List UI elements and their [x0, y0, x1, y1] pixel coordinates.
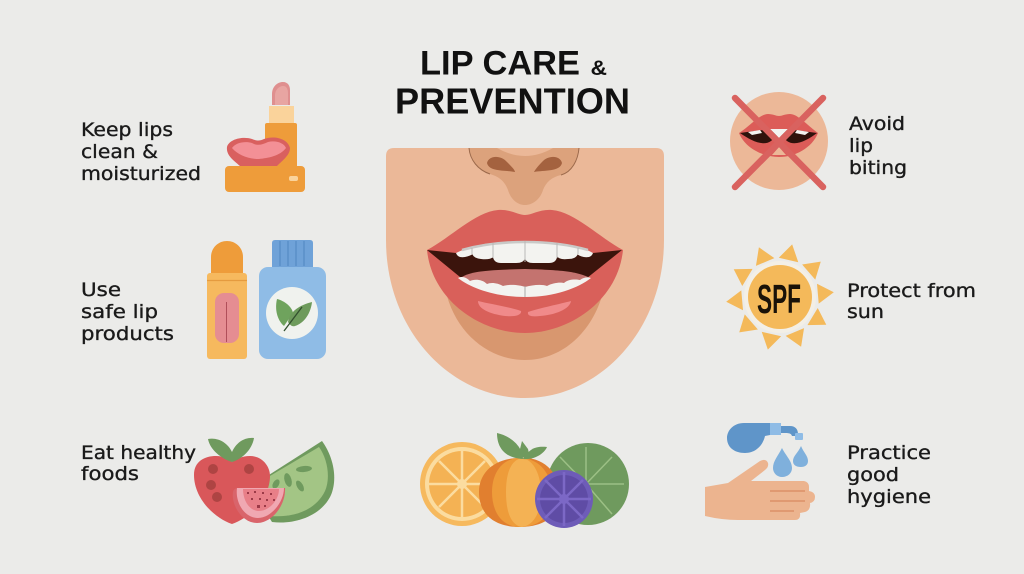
icon: lipstick with lips — [225, 82, 305, 192]
label: clean & — [81, 141, 158, 163]
icon: strawberry — [194, 438, 270, 524]
central face illustration — [386, 148, 664, 398]
item: avoid lip biting — [730, 92, 907, 190]
icon: SPF sun: SPF — [757, 276, 801, 322]
pumpkin leaves — [497, 433, 547, 459]
title — [395, 44, 630, 122]
label: sun — [847, 301, 884, 323]
icon: bottle with leaf — [259, 240, 326, 359]
icon: lip balm tube — [207, 241, 247, 359]
title: LIP CARE — [420, 44, 580, 82]
item: eat healthy foods — [81, 438, 334, 524]
label: Practice — [847, 442, 931, 464]
label: Use — [81, 279, 121, 301]
lime — [547, 443, 629, 525]
label — [849, 113, 907, 179]
label: safe lip — [81, 301, 158, 323]
label: products — [81, 323, 174, 345]
purple citrus — [535, 470, 593, 528]
tongue — [460, 269, 590, 289]
icon: water drops — [773, 446, 808, 477]
label: Avoid — [849, 113, 905, 135]
label: foods — [81, 463, 139, 485]
upper teeth — [456, 241, 593, 263]
label — [81, 442, 196, 485]
lower teeth — [458, 277, 591, 297]
mouth interior — [427, 243, 622, 288]
label — [81, 279, 174, 345]
nose — [469, 148, 579, 205]
item: keep lips clean and moisturized — [81, 82, 305, 192]
chin shadow — [447, 296, 602, 360]
icon: watermelon wedge — [250, 441, 334, 523]
icon: faucet — [727, 423, 803, 453]
icon: crossed-out lips — [730, 92, 828, 190]
label — [847, 280, 976, 323]
item: practice good hygiene — [705, 423, 931, 520]
label — [81, 119, 201, 185]
pumpkin — [479, 458, 560, 527]
label: good — [847, 464, 899, 486]
label: Keep lips — [81, 119, 173, 141]
item: use safe lip products — [81, 240, 326, 359]
icon: hand — [705, 460, 815, 520]
label: hygiene — [847, 486, 931, 508]
label: Protect from — [847, 280, 976, 302]
label — [847, 442, 931, 508]
label: moisturized — [81, 163, 201, 185]
orange slice — [420, 442, 504, 526]
label: biting — [849, 157, 907, 179]
item: protect from sun — [725, 242, 976, 352]
title: PREVENTION — [395, 80, 630, 122]
title: & — [590, 57, 607, 80]
label: Eat healthy — [81, 442, 196, 464]
label: lip — [849, 135, 873, 157]
icon: SPF sun — [725, 242, 835, 352]
lip highlights — [478, 301, 521, 316]
icon group: citrus and pumpkin — [420, 433, 629, 528]
lips — [427, 210, 623, 333]
icon: guava slice — [233, 488, 285, 523]
